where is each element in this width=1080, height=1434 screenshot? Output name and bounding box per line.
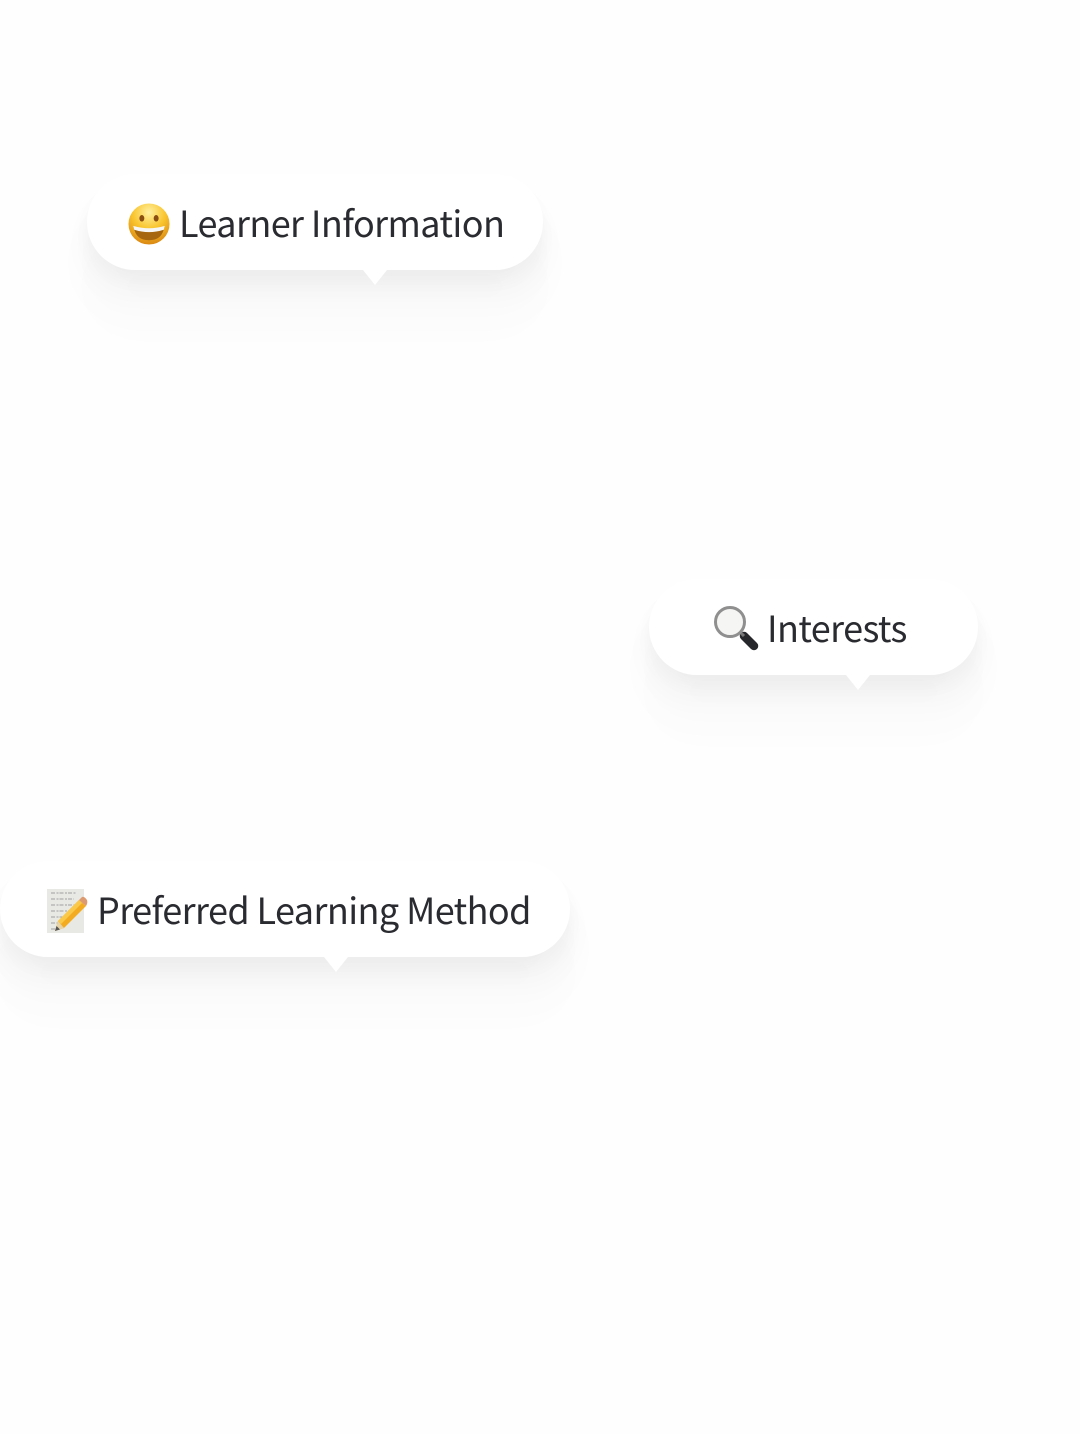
icon: grinning face (128, 204, 170, 244)
callout: Preferred Learning Method (0, 883, 570, 978)
text: Learner Information: Learner Information (179, 196, 504, 248)
callout: Learner Information (88, 196, 542, 291)
icon: magnifying glass (714, 606, 758, 650)
text: Preferred Learning Method: Preferred Learning Method (97, 883, 531, 935)
text: Interests: Interests (767, 601, 907, 653)
callout: Interests (650, 601, 978, 696)
icon: memo with pencil (47, 889, 88, 933)
